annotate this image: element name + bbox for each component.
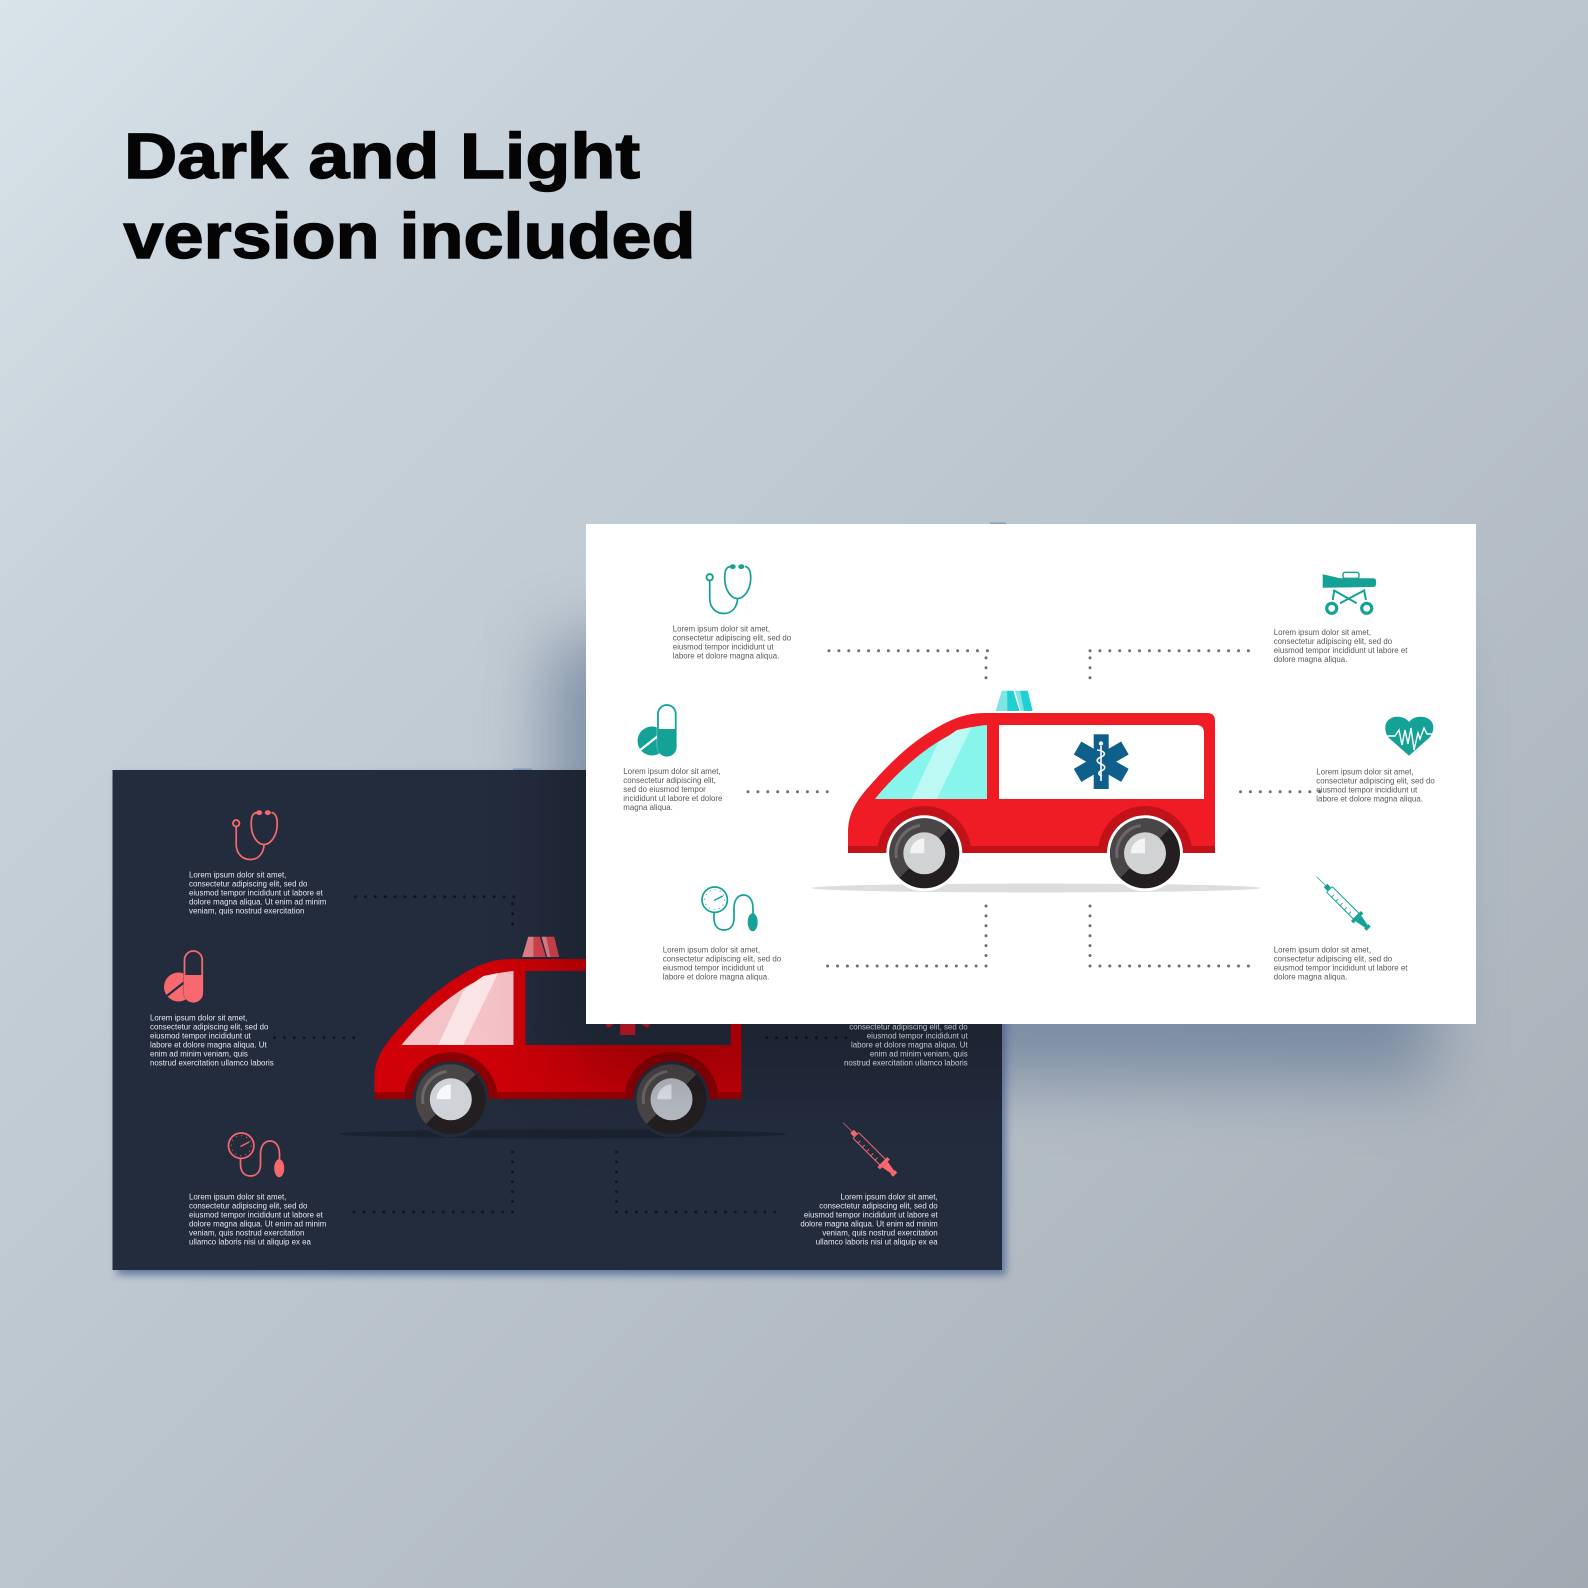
text: middle left: sed do eiusmod tempor: [623, 785, 706, 794]
dark ambulance: [374, 937, 742, 1137]
text: top right: dolore magna aliqua.: [1274, 655, 1347, 664]
dark text: top left: veniam, quis nostrud exercitation: [189, 907, 304, 916]
dark text: bottom left: Lorem ipsum dolor sit amet,: [189, 1192, 286, 1201]
text: top right: eiusmod tempor incididunt ut labore et: [1274, 646, 1408, 655]
dark text: middle left: consectetur adipiscing elit, sed do: [150, 1022, 269, 1031]
dark wheel arches: [404, 1052, 498, 1099]
dark text: bottom left: veniam, quis nostrud exercitation: [189, 1228, 304, 1237]
dark text: middle right: enim ad minim veniam, quis: [870, 1049, 968, 1058]
beacon: [996, 691, 1033, 711]
text: middle right: Lorem ipsum dolor sit amet,: [1316, 767, 1414, 776]
dark text: middle right: consectetur adipiscing elit, sed do: [849, 1022, 968, 1031]
dark icon: stethoscope: [233, 810, 277, 860]
dark ground shadow: [338, 1130, 786, 1138]
side window: [999, 725, 1204, 799]
text: middle right: eiusmod tempor incididunt ut: [1316, 785, 1418, 794]
icon: blood pressure gauge: [702, 887, 758, 931]
dark text: middle left: Lorem ipsum dolor sit amet,: [150, 1013, 247, 1022]
dark text: bottom right: consectetur adipiscing elit, sed do: [819, 1201, 938, 1210]
text: bottom right: consectetur adipiscing elit, sed do: [1274, 955, 1393, 964]
dark text: bottom left: ullamco laboris nisi ut aliquip ex ea: [189, 1237, 312, 1246]
icon: stretcher: [1323, 572, 1376, 613]
text: bottom left: Lorem ipsum dolor sit amet,: [663, 946, 760, 955]
dark icon: blood pressure gauge: [228, 1133, 284, 1177]
dark text: top left: Lorem ipsum dolor sit amet,: [189, 871, 286, 880]
icon: heart with pulse: [1385, 717, 1434, 756]
text: bottom right: dolore magna aliqua.: [1274, 973, 1347, 982]
dark connector dots: [274, 897, 847, 1212]
dark text: top left: dolore magna aliqua. Ut enim ad minim: [189, 898, 327, 907]
text: middle left: Lorem ipsum dolor sit amet,: [623, 767, 721, 776]
title: version included: [124, 200, 696, 272]
text: middle left: consectetur adipiscing elit,: [623, 776, 716, 785]
dark text: bottom right: veniam, quis nostrud exercitation: [822, 1228, 938, 1237]
dark front wheel: [416, 1064, 486, 1134]
light panel background: [586, 524, 1476, 1024]
rear wheel: [1110, 818, 1180, 888]
text: top left: labore et dolore magna aliqua.: [673, 652, 779, 660]
dark rear wheel: [636, 1064, 706, 1134]
wheel arches: [877, 806, 971, 853]
dark text: bottom left: dolore magna aliqua. Ut enim ad minim: [189, 1219, 327, 1228]
dark text: bottom right: Lorem ipsum dolor sit amet,: [840, 1192, 938, 1201]
icon: syringe: [1312, 872, 1374, 934]
text: middle right: labore et dolore magna aliqua.: [1316, 794, 1423, 803]
white panel shadow: [550, 640, 1435, 1080]
dark text: top left: consectetur adipiscing elit, sed do: [189, 880, 308, 889]
windshield: [875, 725, 987, 799]
text: top left: eiusmod tempor incididunt ut: [673, 642, 774, 652]
dark text: bottom right: eiusmod tempor incididunt ut labore et: [804, 1210, 939, 1219]
dark panel shadow: [117, 775, 1006, 1275]
dark medical star: [600, 980, 655, 1035]
dark icon: syringe: [838, 1118, 900, 1180]
text: top right: consectetur adipiscing elit, sed do: [1274, 637, 1393, 646]
dark panel background: [112, 770, 1002, 1270]
text: bottom left: labore et dolore magna aliqua.: [663, 973, 769, 982]
front wheel: [889, 818, 959, 888]
dark text: middle right: eiusmod tempor incididunt ut: [867, 1031, 968, 1040]
dark text: bottom right: dolore magna aliqua. Ut enim ad minim: [800, 1219, 938, 1228]
dark body: [374, 959, 742, 1099]
dark beacon: [522, 937, 559, 957]
text: top left: consectetur adipiscing elit, sed do: [673, 634, 792, 642]
dark text: middle left: nostrud exercitation ullamco laboris: [150, 1058, 274, 1067]
shadow cast on dark panel: [522, 770, 1002, 1104]
icon: pills: [638, 703, 677, 757]
text: top left: Lorem ipsum dolor sit amet,: [673, 624, 770, 634]
title: [124, 120, 696, 272]
text: middle left: incididunt ut labore et dolore: [623, 794, 723, 803]
dark text: top left: eiusmod tempor incididunt ut labore et: [189, 889, 324, 898]
body: [848, 713, 1215, 853]
dark text: middle right: labore et dolore magna aliqua. Ut: [851, 1040, 969, 1049]
dark icon: pills: [164, 949, 203, 1003]
panel: dark version: [112, 768, 1002, 1270]
dark text: bottom left: eiusmod tempor incididunt ut labore et: [189, 1210, 324, 1219]
ground shadow: [812, 884, 1260, 892]
text: bottom left: eiusmod tempor incididunt ut: [663, 964, 764, 973]
dark text: middle left: labore et dolore magna aliqua. Ut: [150, 1040, 267, 1049]
icon: stethoscope: [706, 564, 751, 614]
dark text: middle left: enim ad minim veniam, quis: [150, 1049, 248, 1058]
dark windshield: [402, 971, 514, 1045]
light connector dots: [748, 651, 1321, 966]
ambulance: [848, 691, 1215, 891]
icon: star of life: [1074, 734, 1129, 789]
dark side window: [526, 971, 730, 1045]
text: bottom right: Lorem ipsum dolor sit amet,: [1274, 946, 1371, 955]
text: top right: Lorem ipsum dolor sit amet,: [1274, 628, 1371, 637]
text: middle right: consectetur adipiscing elit, sed do: [1316, 776, 1435, 785]
title: Dark and Light: [124, 120, 640, 192]
dark text: middle right: nostrud exercitation ullamco laboris: [844, 1058, 968, 1067]
dark text: bottom right: ullamco laboris nisi ut aliquip ex ea: [816, 1237, 938, 1246]
text: bottom left: consectetur adipiscing elit, sed do: [663, 955, 782, 964]
dark text: bottom left: consectetur adipiscing elit, sed do: [189, 1201, 308, 1210]
panel: light version: [586, 522, 1476, 1024]
text: middle left: magna aliqua.: [623, 803, 673, 812]
dark text: middle right: Lorem ipsum dolor sit amet,: [870, 1013, 968, 1022]
text: bottom right: eiusmod tempor incididunt ut labore et: [1274, 964, 1408, 973]
dark text: middle left: eiusmod tempor incididunt ut: [150, 1031, 252, 1040]
